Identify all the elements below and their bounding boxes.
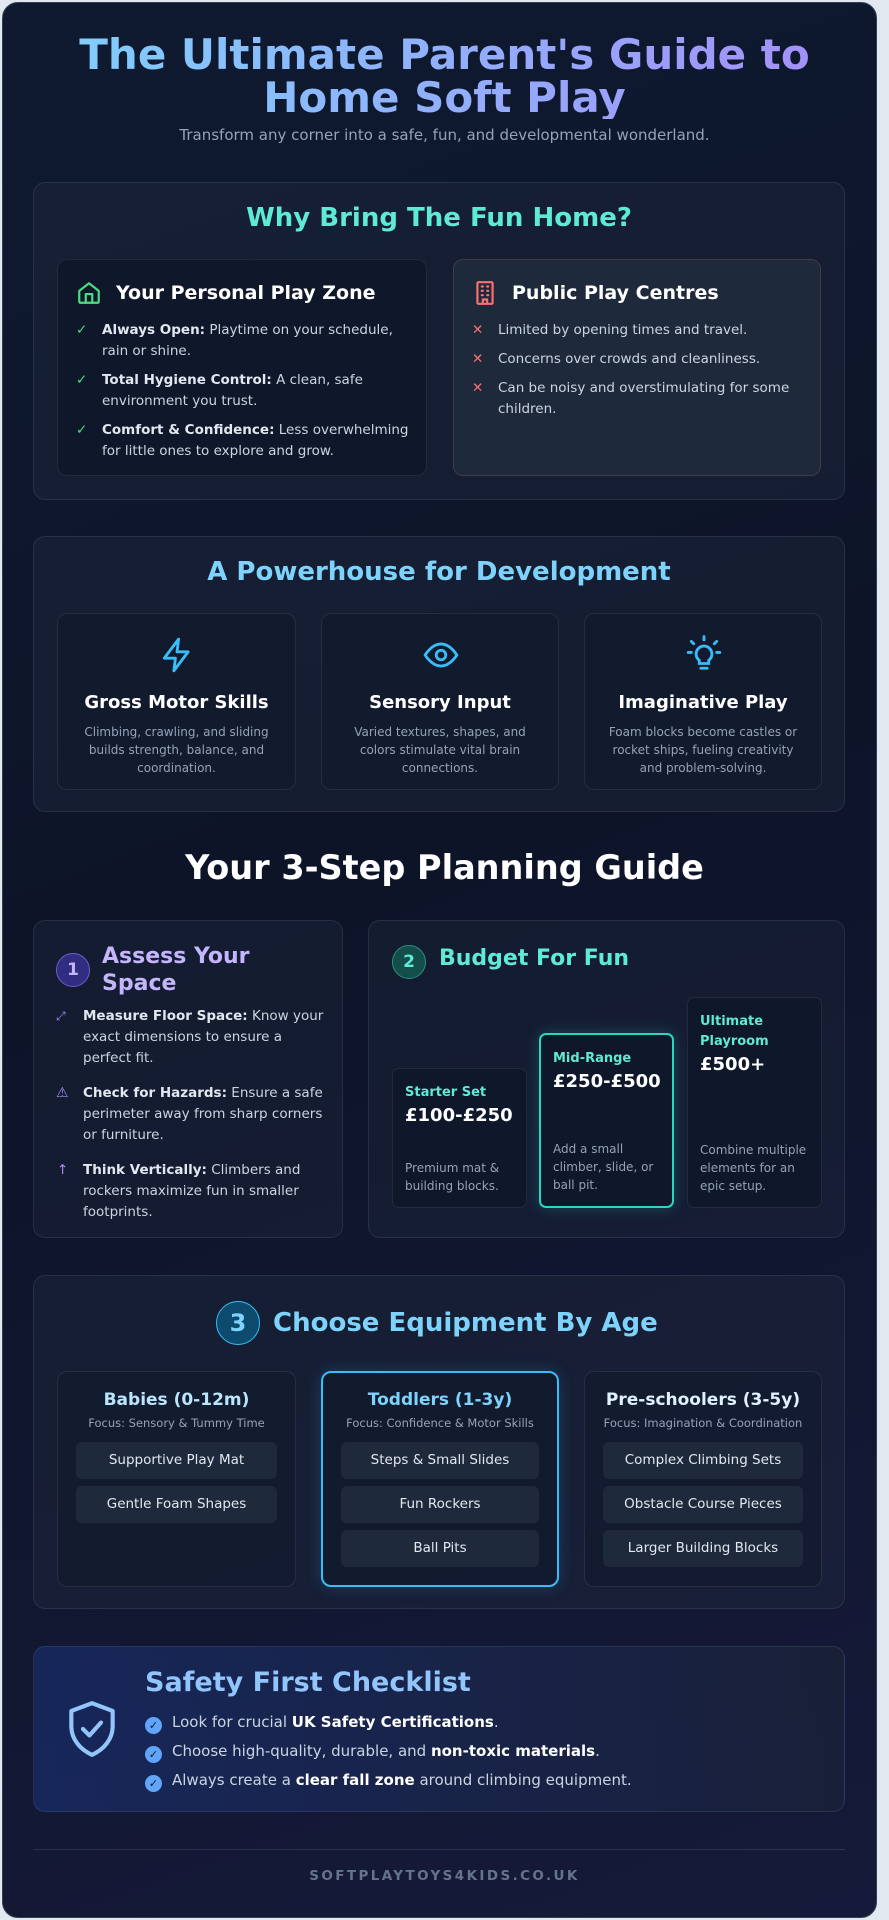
card: toddlers <box>321 1371 559 1587</box>
list: assess items: Think Vertically: Climbers and rockers maximize fun in smaller footprints. <box>83 1162 300 1220</box>
list: safety items <box>145 1713 632 1792</box>
title <box>0 33 889 119</box>
card: babies <box>57 1371 296 1587</box>
budget: mid-range: £250-£500 <box>553 1071 661 1092</box>
card: pre-schoolers: Larger Building Blocks <box>628 1540 778 1556</box>
list: assess items: Check for Hazards: Ensure a safe perimeter away from sharp corners or furniture. <box>83 1085 323 1143</box>
badge: 1: 1 <box>67 960 79 980</box>
list: safety items: Look for crucial UK Safety Certifications. <box>172 1713 499 1731</box>
badge: 2: 2 <box>403 952 415 972</box>
card: gross motor: Climbing, crawling, and sliding builds strength, balance, and coordination. <box>84 725 269 775</box>
card: toddlers: Ball Pits <box>413 1540 467 1556</box>
card: sensory: Sensory Input <box>369 692 511 713</box>
badge: 3: 3 <box>230 1309 246 1337</box>
card: imaginative: Foam blocks become castles or rocket ships, fueling creativity and problem-solving. <box>609 725 797 775</box>
card: sensory: Varied textures, shapes, and colors stimulate vital brain connections. <box>354 725 526 775</box>
card: pre-schoolers <box>584 1371 822 1587</box>
card: pre-schoolers: Complex Climbing Sets <box>625 1452 781 1468</box>
card: toddlers: Focus: Confidence & Motor Skills <box>346 1416 534 1430</box>
budget: starter: Starter Set <box>405 1085 486 1100</box>
footer: SOFTPLAYTOYS4KIDS.CO.UK <box>309 1868 580 1884</box>
heading: assess: Assess Your <box>102 944 250 969</box>
card: pre-schoolers: Focus: Imagination & Coordination <box>604 1416 802 1430</box>
card: public play centres: ✕ <box>472 322 483 338</box>
card: personal play zone: ✓ <box>76 372 87 388</box>
badge: 3 <box>216 1301 260 1345</box>
subtitle: Transform any corner into a safe, fun, and developmental wonderland. <box>179 126 710 144</box>
budget: mid-range <box>539 1033 674 1208</box>
card: public play centres <box>453 259 821 476</box>
card: public play centres: Public Play Centres <box>512 282 719 304</box>
card: personal play zone: Your Personal Play Zone <box>116 282 376 304</box>
card: gross motor <box>57 613 296 790</box>
card: personal play zone: Total Hygiene Control: A clean, safe environment you trust. <box>102 372 363 409</box>
badge: 2 <box>392 945 426 979</box>
card: toddlers: Fun Rockers <box>399 1496 481 1512</box>
card: babies: Gentle Foam Shapes <box>107 1496 246 1512</box>
badge: 1 <box>56 953 90 987</box>
card: public play centres: ✕ <box>472 380 483 396</box>
icon: bulb <box>686 635 722 670</box>
heading: safety: Safety First Checklist <box>145 1667 471 1698</box>
heading: development: A Powerhouse for Development <box>207 557 671 587</box>
budget: starter <box>392 1068 527 1208</box>
card: personal play zone: ✓ <box>76 322 87 338</box>
list: assess items: ⚠ <box>56 1085 69 1101</box>
budget: starter: £100-£250 <box>405 1105 513 1126</box>
budget: ultimate: Playroom <box>700 1034 769 1049</box>
card: pre-schoolers: Obstacle Course Pieces <box>624 1496 782 1512</box>
card: imaginative: Imaginative Play <box>618 692 788 713</box>
budget: ultimate: £500+ <box>700 1054 765 1075</box>
budget: mid-range: Mid-Range <box>553 1051 631 1066</box>
list: assess items <box>56 1008 324 1220</box>
panel: why bring the fun home <box>33 182 845 500</box>
heading: assess: Space <box>102 971 176 996</box>
heading: assess <box>102 944 250 996</box>
list: assess items: Measure Floor Space: Know your exact dimensions to ensure a perfect fit. <box>83 1008 323 1066</box>
budget: ultimate <box>687 997 822 1208</box>
title: The Ultimate Parent's Guide to <box>79 30 810 79</box>
list: safety items: ✓ <box>149 1777 158 1790</box>
card: sensory <box>321 613 559 790</box>
list: assess items: ↑ <box>57 1162 68 1178</box>
card: public play centres: Concerns over crowds and cleanliness. <box>498 351 760 367</box>
card: imaginative <box>584 613 822 790</box>
icon: eye <box>424 642 458 668</box>
panel: safety checklist <box>33 1646 845 1812</box>
list: safety items: Always create a clear fall zone around climbing equipment. <box>172 1771 632 1789</box>
card: personal play zone: Always Open: Playtime on your schedule, rain or shine. <box>102 322 393 359</box>
panel: step 3 equipment by age <box>33 1275 845 1609</box>
card: gross motor: Gross Motor Skills <box>84 692 269 713</box>
card: personal play zone <box>57 259 427 476</box>
list: safety items: ✓ <box>149 1719 158 1732</box>
icon: building <box>476 281 494 305</box>
card: public play centres: ✕ <box>472 351 483 367</box>
card: personal play zone: Comfort & Confidence: Less overwhelming for little ones to explore and grow. <box>102 422 408 459</box>
icon: house <box>78 282 100 304</box>
card: babies: Supportive Play Mat <box>109 1452 244 1468</box>
icon: shield <box>69 1701 115 1757</box>
card: toddlers: Steps & Small Slides <box>371 1452 509 1468</box>
icon: lightning <box>162 638 190 672</box>
card: public play centres: Limited by opening times and travel. <box>498 322 747 338</box>
card: babies: Focus: Sensory & Tummy Time <box>88 1416 265 1430</box>
panel: step 2 budget <box>368 920 845 1238</box>
heading: planning guide: Your 3-Step Planning Guide <box>185 848 704 887</box>
list: safety items: Choose high-quality, durable, and non-toxic materials. <box>172 1742 600 1760</box>
budget: ultimate: Combine multiple elements for an epic setup. <box>700 1143 806 1193</box>
card: personal play zone: ✓ <box>76 422 87 438</box>
card: pre-schoolers: Pre-schoolers (3-5y) <box>606 1390 800 1410</box>
panel: development <box>33 536 845 812</box>
list: assess items: ⤢ <box>56 1009 66 1023</box>
heading: budget: Budget For Fun <box>439 946 629 971</box>
heading: step 3 <box>216 1301 658 1345</box>
card: toddlers: Toddlers (1-3y) <box>368 1390 512 1410</box>
heading: step 3: Choose Equipment By Age <box>273 1308 658 1338</box>
budget: starter: Premium mat & building blocks. <box>405 1161 499 1193</box>
list: safety items: ✓ <box>149 1748 158 1761</box>
heading: why: Why Bring The Fun Home? <box>246 203 632 233</box>
budget: mid-range: Add a small climber, slide, or ball pit. <box>553 1142 653 1192</box>
title: Home Soft Play <box>263 73 626 122</box>
panel: step 1 assess space <box>33 920 343 1238</box>
budget: ultimate: Ultimate <box>700 1014 763 1029</box>
card: public play centres: Can be noisy and overstimulating for some children. <box>498 380 789 417</box>
card: babies: Babies (0-12m) <box>104 1390 249 1410</box>
